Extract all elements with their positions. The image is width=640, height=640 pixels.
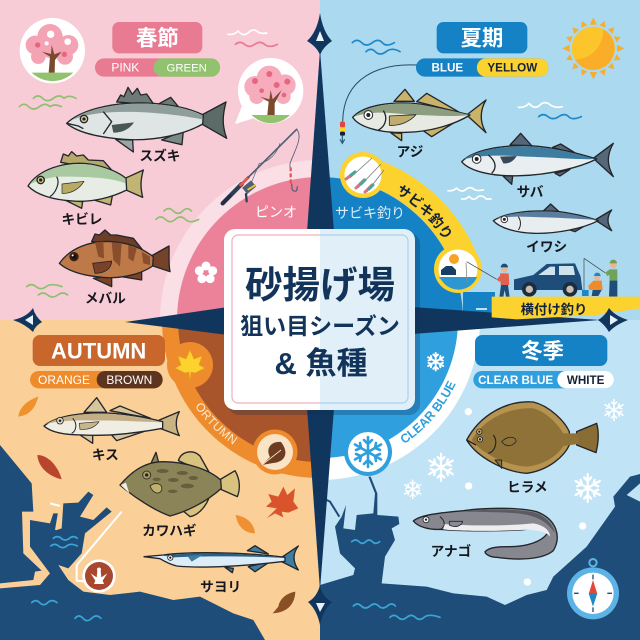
fish: サヨリ	[144, 546, 298, 573]
label: カワハギ: カワハギ	[142, 523, 197, 538]
fish: カワハギ	[120, 452, 239, 517]
colour pill: orange and brown: ORANGE	[38, 373, 90, 387]
panel: summer	[340, 17, 640, 319]
colour pill: blue and yellow: BLUE	[431, 62, 463, 75]
heading: 春節: 春節	[136, 26, 179, 50]
heading: AUTUMN: AUTUMN	[51, 338, 146, 363]
fish: ヒラメ	[467, 402, 598, 473]
snow dots	[465, 408, 586, 586]
season ring: spring	[160, 160, 320, 320]
icon: sakura tree circle	[20, 18, 85, 83]
fish: スズキ	[67, 87, 227, 152]
label: アナゴ: アナゴ	[431, 543, 472, 559]
season ring: autumn	[162, 320, 320, 478]
heading: 冬季	[475, 335, 607, 366]
heading: AUTUMN	[33, 335, 165, 366]
label: サヨリ: サヨリ	[200, 580, 241, 595]
car	[514, 263, 582, 297]
label: アジ: アジ	[397, 144, 424, 159]
label: スズキ: スズキ	[140, 148, 180, 164]
icon: harbour location pin	[82, 559, 116, 593]
icon: autumn leaf badge	[167, 342, 213, 388]
label: サビキ釣り on blue: サビキ釣り	[335, 205, 405, 221]
colour pill: orange and brown	[30, 371, 163, 388]
label: ヒラメ: ヒラメ	[507, 480, 548, 495]
label: サビキ釣り on yellow band: サビキ釣り	[400, 185, 451, 237]
label: ORTUMN arc: ORTUMN	[196, 403, 238, 444]
map: winter coast	[320, 474, 640, 640]
fish: キス	[44, 398, 179, 443]
angler: standing left in red	[467, 262, 510, 300]
title line 1: 砂揚げ場	[245, 264, 395, 306]
heading: 冬季: 冬季	[521, 339, 564, 363]
fish: サバ	[462, 133, 613, 184]
icon: red leaf	[37, 455, 62, 479]
label: CLEAR BLUE arc: CLEAR BLUE	[401, 380, 456, 442]
fish: イワシ	[493, 204, 612, 233]
compass arrowhead: north	[307, 13, 332, 55]
map: autumn harbour coast	[0, 445, 265, 640]
icon: maple leaf	[266, 487, 298, 518]
heading: 夏期: 夏期	[461, 26, 503, 50]
water inlet under summer car icon	[463, 292, 495, 322]
heading: 春節	[112, 22, 202, 53]
heading: 夏期	[437, 22, 527, 53]
label: サバ: サバ	[517, 185, 544, 200]
icon: sabiki rig badge	[340, 152, 386, 198]
icon: sakura flower	[195, 262, 217, 283]
waves	[19, 30, 277, 297]
compass star: navy cross	[125, 50, 600, 590]
colour pill: blue and yellow	[416, 58, 548, 77]
icon: orange leaf	[18, 397, 38, 417]
fish: メバル	[59, 230, 170, 287]
colour pill: pink and green	[95, 58, 220, 77]
season ring: winter	[320, 320, 480, 480]
harbour waves	[32, 537, 101, 621]
icon: car at seaside badge	[434, 245, 482, 293]
label: メバル: メバル	[85, 291, 126, 306]
icon: brown leaf	[273, 592, 295, 613]
fish: キビレ	[28, 152, 143, 208]
fish: アジ	[353, 89, 486, 141]
fishing rod	[223, 129, 299, 203]
fishing line and bobber	[340, 65, 417, 143]
compass arrowhead: south	[308, 585, 332, 625]
colour pill: blue and yellow: YELLOW	[487, 62, 537, 75]
icon: snowflake badge	[344, 428, 392, 476]
icon: sun	[562, 17, 624, 79]
panel: autumn	[18, 335, 298, 621]
anglers: right group with bucket	[582, 258, 617, 297]
label: ピンオ: ピンオ	[255, 204, 297, 220]
colour pill: clear blue and white: WHITE	[567, 374, 605, 387]
colour pill: pink and green: GREEN	[167, 63, 207, 75]
waves	[352, 40, 581, 199]
panel: spring	[19, 18, 303, 306]
title line 2: 狙い目シーズン	[240, 313, 400, 339]
compass arrowhead: east	[598, 308, 628, 332]
title line 3: & 魚種	[274, 346, 368, 381]
banner: 横付け釣り: 横付け釣り	[521, 301, 587, 317]
icons: snowflakes	[405, 353, 623, 502]
banner: 横付け釣り	[492, 297, 640, 319]
compass arrowhead: west	[13, 308, 42, 332]
label: キビレ: キビレ	[62, 211, 102, 227]
icon: brown leaf badge	[252, 430, 298, 474]
card: centre title	[224, 229, 420, 415]
icon: small orange leaf	[236, 515, 255, 533]
panel: winter	[352, 335, 623, 619]
label: イワシ: イワシ	[526, 240, 567, 255]
icon: compass	[567, 559, 619, 619]
colour pill: clear blue and white	[473, 371, 614, 388]
label: キス: キス	[92, 447, 119, 462]
colour pill: orange and brown: BROWN	[106, 373, 152, 387]
season ring: summer	[320, 170, 467, 320]
fish: アナゴ	[413, 508, 557, 559]
speech bubble with sakura tree	[235, 58, 303, 124]
colour pill: pink and green: PINK	[111, 61, 139, 75]
winter sea waves	[352, 540, 440, 619]
colour pill: clear blue and white: CLEAR BLUE	[478, 374, 553, 387]
